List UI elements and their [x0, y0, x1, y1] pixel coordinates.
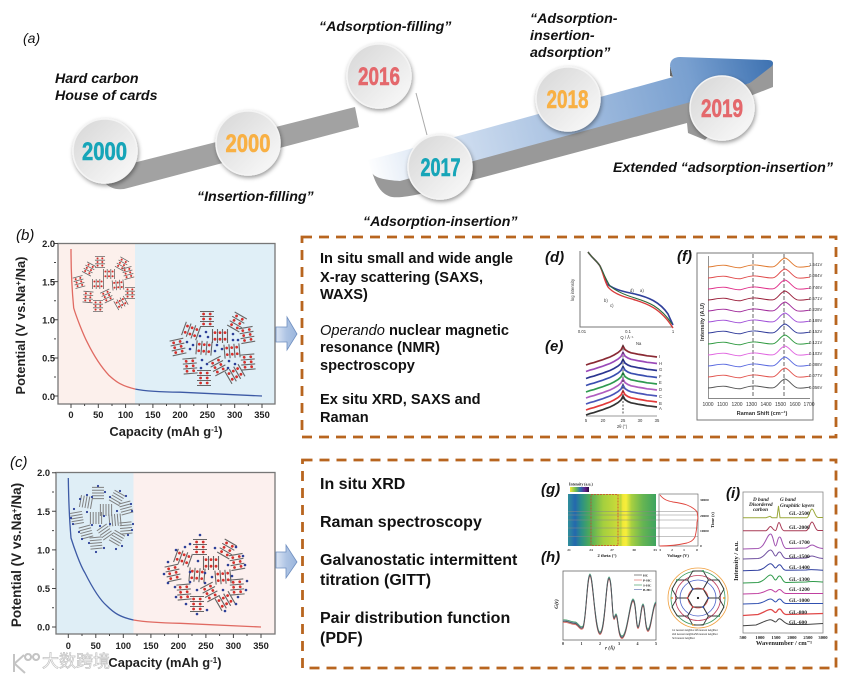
pair distribution plot h: 2 — [599, 641, 601, 646]
pair distribution plot h: S-HC — [643, 584, 652, 588]
graphitization Raman plot i: Graphitic layers — [780, 503, 814, 509]
XRD stack plot e: C — [659, 394, 662, 399]
pair distribution plot h: 5 — [655, 641, 657, 646]
label e: (e) — [545, 338, 563, 355]
blue region — [135, 243, 275, 404]
x tick labels: 50 — [91, 641, 101, 651]
technique list: resonance (NMR) — [320, 340, 440, 356]
caption: adsorption-insertion-adsorption: “Adsorption- — [530, 11, 618, 27]
y axis title: + — [14, 281, 23, 286]
circle 2017 — [408, 135, 472, 199]
Raman plot f: 0.189V — [809, 318, 822, 323]
SAXS plot d: Q / Å⁻¹ — [620, 335, 634, 340]
Raman plot f: 0.121V — [809, 340, 822, 345]
x tick labels: 100 — [116, 641, 131, 651]
XRD stack plot e — [585, 341, 662, 429]
x axis title: Capacity (mAh g — [108, 655, 210, 670]
caption: house of cards: Hard carbon — [55, 71, 139, 87]
pair distribution plot h: 1 — [580, 641, 582, 646]
XRD stack plot e: 2θ (°) — [617, 424, 628, 429]
XRD stack plot e: Na — [636, 341, 642, 346]
Raman plot f: 1100 — [717, 402, 728, 408]
dashed border — [302, 237, 836, 437]
label h: (h) — [541, 549, 560, 566]
hexagonal lattice diagram — [668, 568, 728, 640]
label i: (i) — [726, 485, 740, 502]
empty carbon cluster with sodium — [70, 485, 134, 553]
circle 2000 teal: 2000 — [82, 138, 127, 166]
XRD stack plot e: G — [659, 367, 662, 372]
x axis title: -1 — [211, 425, 219, 434]
label c: (c) — [10, 454, 28, 471]
technique list: Ex situ XRD, SAXS and — [320, 392, 481, 408]
blue 3D arrow — [368, 57, 773, 197]
technique list: titration (GITT) — [320, 572, 431, 589]
y tick labels: 0.5 — [37, 584, 50, 594]
operando XRD heatmap g: 2 — [671, 548, 673, 552]
x axis title: ) — [217, 655, 222, 670]
operando XRD heatmap g: 24 — [589, 548, 593, 552]
technique list: Pair distribution function — [320, 610, 510, 627]
circle 2018 — [536, 67, 600, 131]
red curve segment — [71, 249, 135, 389]
carbon cluster without sodium — [73, 257, 135, 311]
operando XRD heatmap g: Voltage (V) — [667, 553, 689, 558]
graphitization Raman plot i: GL-1300 — [789, 577, 810, 583]
y axis title: /Na) — [13, 257, 28, 281]
x tick labels: 300 — [227, 410, 242, 420]
y tick labels: 0.0 — [37, 622, 50, 632]
pair distribution plot h — [553, 571, 657, 652]
circle 2016: 2016 — [358, 63, 400, 91]
technique list: nuclear magnetic — [385, 323, 509, 339]
hexagonal lattice diagram: 2nd nearest neighbor — [672, 633, 696, 636]
circle 2000 teal — [73, 119, 137, 183]
Raman plot f — [697, 253, 822, 420]
graphitization Raman plot i: Disordered — [748, 502, 773, 508]
XRD stack plot e: E — [659, 380, 662, 385]
y axis title: /Na) — [9, 483, 24, 508]
caption: insertion-filling: “Insertion-filling” — [197, 189, 315, 205]
y axis title: Potential (V vs.Na — [13, 286, 28, 394]
panel b: potential chart — [13, 227, 275, 439]
operando XRD heatmap g: 20000 — [700, 514, 709, 518]
SAXS plot d: d) — [630, 288, 634, 293]
pair distribution plot h: 3 — [618, 641, 620, 646]
dashed border — [302, 460, 836, 668]
x tick labels: 0 — [66, 641, 71, 651]
graphitization Raman plot i: 3000 — [818, 635, 828, 640]
technique list: In situ small and wide angle — [320, 251, 513, 267]
operando XRD heatmap g: 0 — [696, 548, 698, 552]
arrow c to techniques — [276, 545, 297, 578]
circle 2019 — [690, 76, 754, 140]
XRD stack plot e: 35 — [655, 418, 660, 423]
XRD stack plot e: 20 — [601, 418, 606, 423]
operando XRD heatmap g: 0 — [700, 544, 702, 548]
operando XRD heatmap g: 21 — [567, 548, 571, 552]
gray ribbon arrow tail — [105, 107, 359, 189]
graphitization Raman plot i: GL-2500 — [789, 511, 810, 517]
graphitization Raman plot i: Intensity / a.u. — [733, 541, 740, 581]
XRD stack plot e: 30 — [638, 418, 643, 423]
y axis title: + — [10, 508, 19, 513]
technique list: Operando — [320, 323, 385, 339]
x tick labels: 300 — [226, 641, 241, 651]
technique list: Galvanostatic intermittent — [320, 552, 518, 569]
label b: (b) — [16, 227, 34, 244]
carbon cluster with sodium in pores — [170, 312, 256, 386]
Raman plot f: 0.571V — [809, 296, 822, 301]
caption: adsorption-filling: “Adsorption-filling” — [319, 19, 452, 35]
panel a: development timeline — [23, 11, 834, 230]
panel c techniques box — [302, 460, 836, 668]
graphitization Raman plot i: 2000 — [787, 635, 797, 640]
XRD stack plot e: 5 — [585, 418, 588, 423]
Raman plot f: 0.228V — [809, 307, 822, 312]
circle 2000 orange: 2000 — [226, 130, 270, 158]
hexagonal lattice diagram: 1st nearest neighbor — [672, 629, 695, 632]
graphitization Raman plot i: GL-1200 — [789, 587, 810, 593]
graphitization Raman plot i: GL-800 — [789, 610, 807, 616]
XRD stack plot e: A — [659, 406, 662, 411]
blue region — [56, 472, 134, 634]
watermark — [14, 652, 110, 673]
caption: extended adsorption-insertion: Extended “adsorption-insertion” — [613, 160, 834, 176]
XRD stack plot e: 25 — [621, 418, 626, 423]
pink region — [58, 243, 135, 404]
x tick labels: 200 — [172, 410, 188, 420]
blue curve segment — [135, 389, 262, 396]
pair distribution plot h: HC — [643, 574, 649, 578]
XRD stack plot e: I — [659, 354, 660, 359]
caption: adsorption-insertion-adsorption: insertion- — [530, 28, 595, 44]
technique list: In situ XRD — [320, 476, 405, 493]
hexagonal lattice diagram: 4th nearest neighbor — [695, 629, 718, 632]
x tick labels: 100 — [118, 410, 133, 420]
operando XRD heatmap g: Intensity (a.u.) — [569, 482, 593, 486]
operando XRD heatmap g: 3 — [659, 548, 661, 552]
SAXS plot d: a) — [640, 288, 644, 293]
x axis title: -1 — [210, 656, 218, 665]
circle 2017: 2017 — [420, 154, 460, 182]
panel b techniques box — [302, 237, 836, 437]
y tick labels: 1.5 — [42, 278, 55, 288]
operando XRD heatmap g: 1 — [683, 548, 685, 552]
label a: (a) — [23, 30, 40, 46]
Raman plot f: 1400 — [760, 402, 772, 408]
blue curve segment — [68, 478, 134, 620]
SAXS plot d: 0.01 — [578, 329, 587, 334]
circle 2016 — [347, 44, 411, 108]
pair distribution plot h: G(r) — [553, 599, 560, 609]
Raman plot f: 0.088V — [809, 362, 822, 367]
Raman plot f: 0.084V — [809, 273, 822, 278]
technique list: Raman — [320, 410, 369, 426]
graphitization Raman plot i: GL-2000 — [789, 525, 810, 531]
graphitization Raman plot i: GL-1500 — [789, 554, 810, 560]
graphitization Raman plot i: G band — [780, 497, 796, 503]
x tick labels: 350 — [253, 641, 269, 651]
operando XRD heatmap g: Time (s) — [710, 512, 715, 528]
technique list: X-ray scattering (SAXS, — [320, 270, 483, 286]
pair distribution plot h: P-HC — [643, 578, 652, 582]
Raman plot f: Raman Shift (cm⁻¹) — [737, 410, 788, 417]
Raman plot f: 0.103V — [809, 351, 822, 356]
Raman plot f: 0.077V — [809, 373, 822, 378]
circle 2000 orange — [216, 111, 280, 175]
y tick labels: 2.0 — [37, 468, 50, 478]
SAXS plot d — [570, 251, 675, 340]
graphitization Raman plot i: GL-1400 — [789, 565, 810, 571]
hexagonal lattice diagram: 5th nearest neighbor — [695, 633, 718, 636]
arrow b to techniques — [276, 317, 297, 350]
graphitization Raman plot i: D band — [752, 497, 769, 503]
Raman plot f: Intensity (A.U) — [700, 303, 706, 341]
x tick labels: 50 — [93, 410, 103, 420]
x tick labels: 150 — [145, 410, 161, 420]
pair distribution plot h: B-HC — [643, 588, 652, 592]
x tick labels: 200 — [171, 641, 186, 651]
red curve segment — [134, 620, 261, 627]
filled carbon cluster with sodium — [163, 534, 248, 615]
XRD stack plot e: F — [659, 374, 662, 379]
pair distribution plot h: r (Å) — [605, 646, 615, 652]
x axis title: ) — [218, 424, 223, 439]
caption: adsorption-insertion-adsorption: adsorption” — [530, 45, 611, 61]
SAXS plot d: 0.1 — [625, 329, 632, 334]
SAXS plot d: c) — [610, 303, 614, 308]
Raman plot f: 1200 — [731, 402, 743, 408]
technique list: Raman spectroscopy — [320, 514, 482, 531]
label f: (f) — [677, 248, 692, 265]
Raman plot f: 0.746V — [809, 285, 822, 290]
SAXS plot d: b) — [604, 298, 608, 303]
graphitization Raman plot i: 1000 — [755, 635, 765, 640]
graphitization Raman plot i: GL-600 — [789, 620, 807, 626]
operando XRD heatmap g: 30000 — [700, 498, 709, 502]
label g: (g) — [541, 481, 560, 498]
Raman plot f: 1300 — [746, 402, 757, 408]
graphitization Raman plot i: 500 — [740, 635, 747, 640]
hexagonal lattice diagram: 3rd nearest neighbor — [672, 637, 695, 640]
y tick labels: 0.0 — [42, 392, 55, 402]
Raman plot f: 0.152V — [809, 329, 822, 334]
chart axes — [54, 244, 275, 408]
Raman plot f: 1.541V — [809, 262, 822, 267]
x tick labels: 350 — [254, 410, 270, 420]
label d: (d) — [545, 249, 564, 266]
chart axes — [52, 472, 275, 638]
graphitization Raman plot i: Wavenumber / cm⁻¹ — [756, 640, 812, 647]
technique list: spectroscopy — [320, 358, 416, 374]
caption: adsorption-insertion: “Adsorption-insertion” — [363, 214, 518, 230]
graphitization Raman plot i: 1500 — [771, 635, 781, 640]
Raman plot f: 1700 — [803, 402, 815, 408]
x axis title: Capacity (mAh g — [109, 424, 211, 439]
pair distribution plot h: 4 — [636, 641, 638, 646]
y tick labels: 1.0 — [37, 546, 50, 556]
y tick labels: 2.0 — [42, 239, 55, 249]
operando XRD heatmap g — [567, 482, 715, 558]
y tick labels: 0.5 — [42, 354, 55, 364]
pink region — [134, 472, 275, 634]
Raman plot f: 1000 — [702, 402, 714, 408]
x tick labels: 250 — [198, 641, 214, 651]
graphitization Raman plot i: GL-1000 — [789, 598, 810, 604]
graphitization Raman plot i: 2500 — [803, 635, 813, 640]
watermark text: 大数跨境 — [42, 652, 110, 671]
y axis title: Potential (V vs.Na — [9, 513, 24, 627]
Raman plot f: 0.056V — [809, 385, 822, 390]
operando XRD heatmap g: 2 theta (°) — [597, 553, 617, 558]
operando XRD heatmap g: 33 — [653, 548, 657, 552]
x tick labels: 0 — [68, 410, 74, 420]
connector between 2016 and 2017 — [416, 93, 427, 135]
Raman plot f: 1600 — [789, 402, 801, 408]
pair distribution plot h: 0 — [562, 641, 564, 646]
graphitization Raman plot i — [733, 492, 828, 647]
caption: house of cards: House of cards — [55, 88, 158, 104]
operando XRD heatmap g: 27 — [610, 548, 614, 552]
x tick labels: 150 — [143, 641, 159, 651]
y tick labels: 1.5 — [37, 507, 50, 517]
SAXS plot d: log intensity — [570, 278, 575, 301]
XRD stack plot e: H — [659, 361, 662, 366]
circle 2019: 2019 — [701, 95, 743, 123]
technique list: WAXS) — [320, 287, 368, 303]
watermark logo — [14, 654, 39, 673]
Raman plot f: 1500 — [775, 402, 786, 408]
x tick labels: 250 — [200, 410, 215, 420]
y tick labels: 1.0 — [42, 316, 55, 326]
SAXS plot d: 1 — [672, 329, 675, 334]
technique list: (PDF) — [320, 630, 363, 647]
operando XRD heatmap g: 30 — [632, 548, 636, 552]
circle 2018: 2018 — [546, 86, 589, 114]
operando XRD heatmap g: 10000 — [700, 529, 709, 533]
panel c: potential chart — [9, 454, 275, 670]
graphitization Raman plot i: GL-1700 — [789, 540, 810, 546]
graphitization Raman plot i: carbon — [753, 507, 768, 513]
XRD stack plot e: D — [659, 387, 662, 392]
XRD stack plot e: B — [659, 401, 662, 406]
